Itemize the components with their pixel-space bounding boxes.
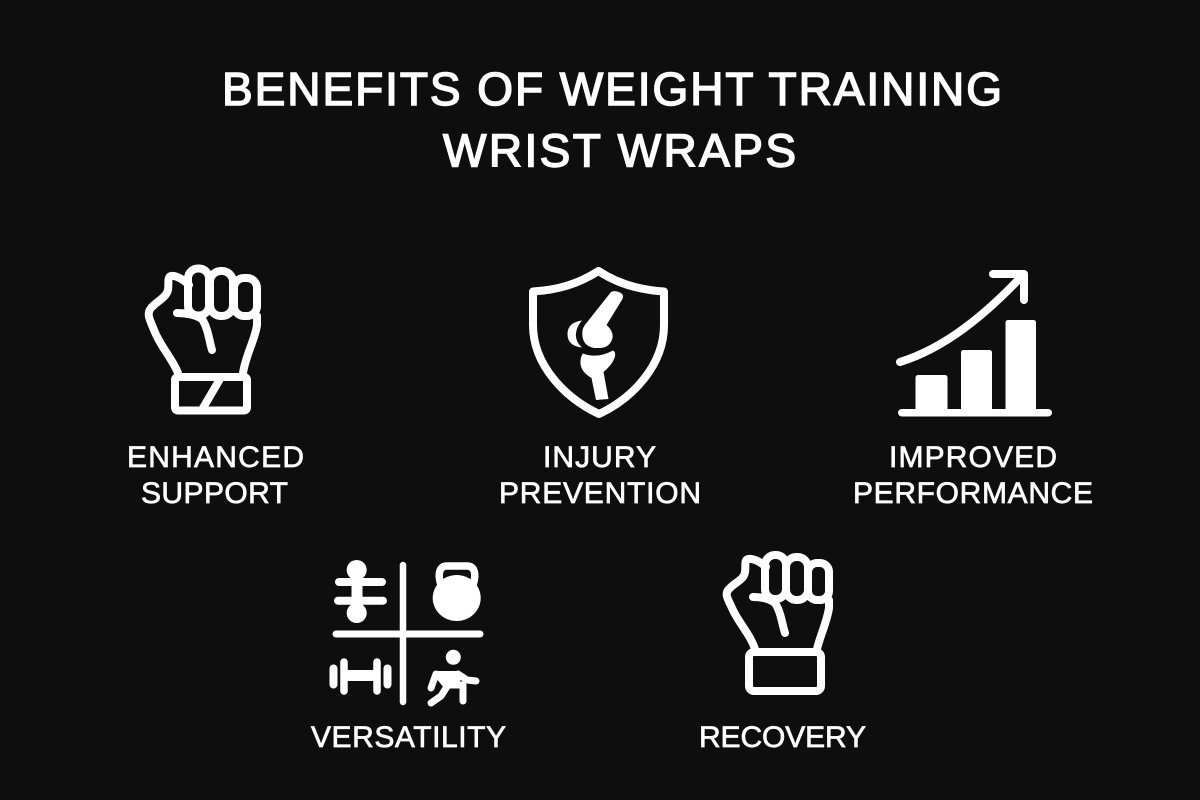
panel: recovery [699, 555, 866, 754]
label: improved performance: PERFORMANCE [853, 477, 1093, 510]
icon: fist with wrapped wrist [149, 268, 257, 410]
panel: enhanced support [127, 268, 304, 510]
title [222, 63, 1002, 176]
label: recovery: RECOVERY [699, 721, 866, 754]
panel: improved performance [853, 274, 1093, 510]
icon: shield with knee joint [533, 271, 664, 414]
panel: injury prevention [499, 271, 701, 510]
title: WRIST WRAPS [443, 124, 796, 176]
label: enhanced support: SUPPORT [141, 477, 288, 510]
label: enhanced support: ENHANCED [127, 441, 304, 474]
label: versatility: VERSATILITY [311, 721, 506, 754]
title: BENEFITS OF WEIGHT TRAINING [222, 63, 1002, 115]
label: improved performance: IMPROVED [889, 441, 1057, 474]
icon: raised fist with cuff [727, 555, 829, 691]
panel: versatility [311, 560, 506, 754]
icon: four-part equipment grid [334, 560, 481, 703]
label: injury prevention [499, 441, 701, 510]
icon: rising bar chart with arrow [898, 274, 1052, 416]
label: improved performance [853, 441, 1093, 510]
label: injury prevention: INJURY [543, 441, 656, 474]
label: enhanced support [127, 441, 304, 510]
label: injury prevention: PREVENTION [499, 477, 701, 510]
